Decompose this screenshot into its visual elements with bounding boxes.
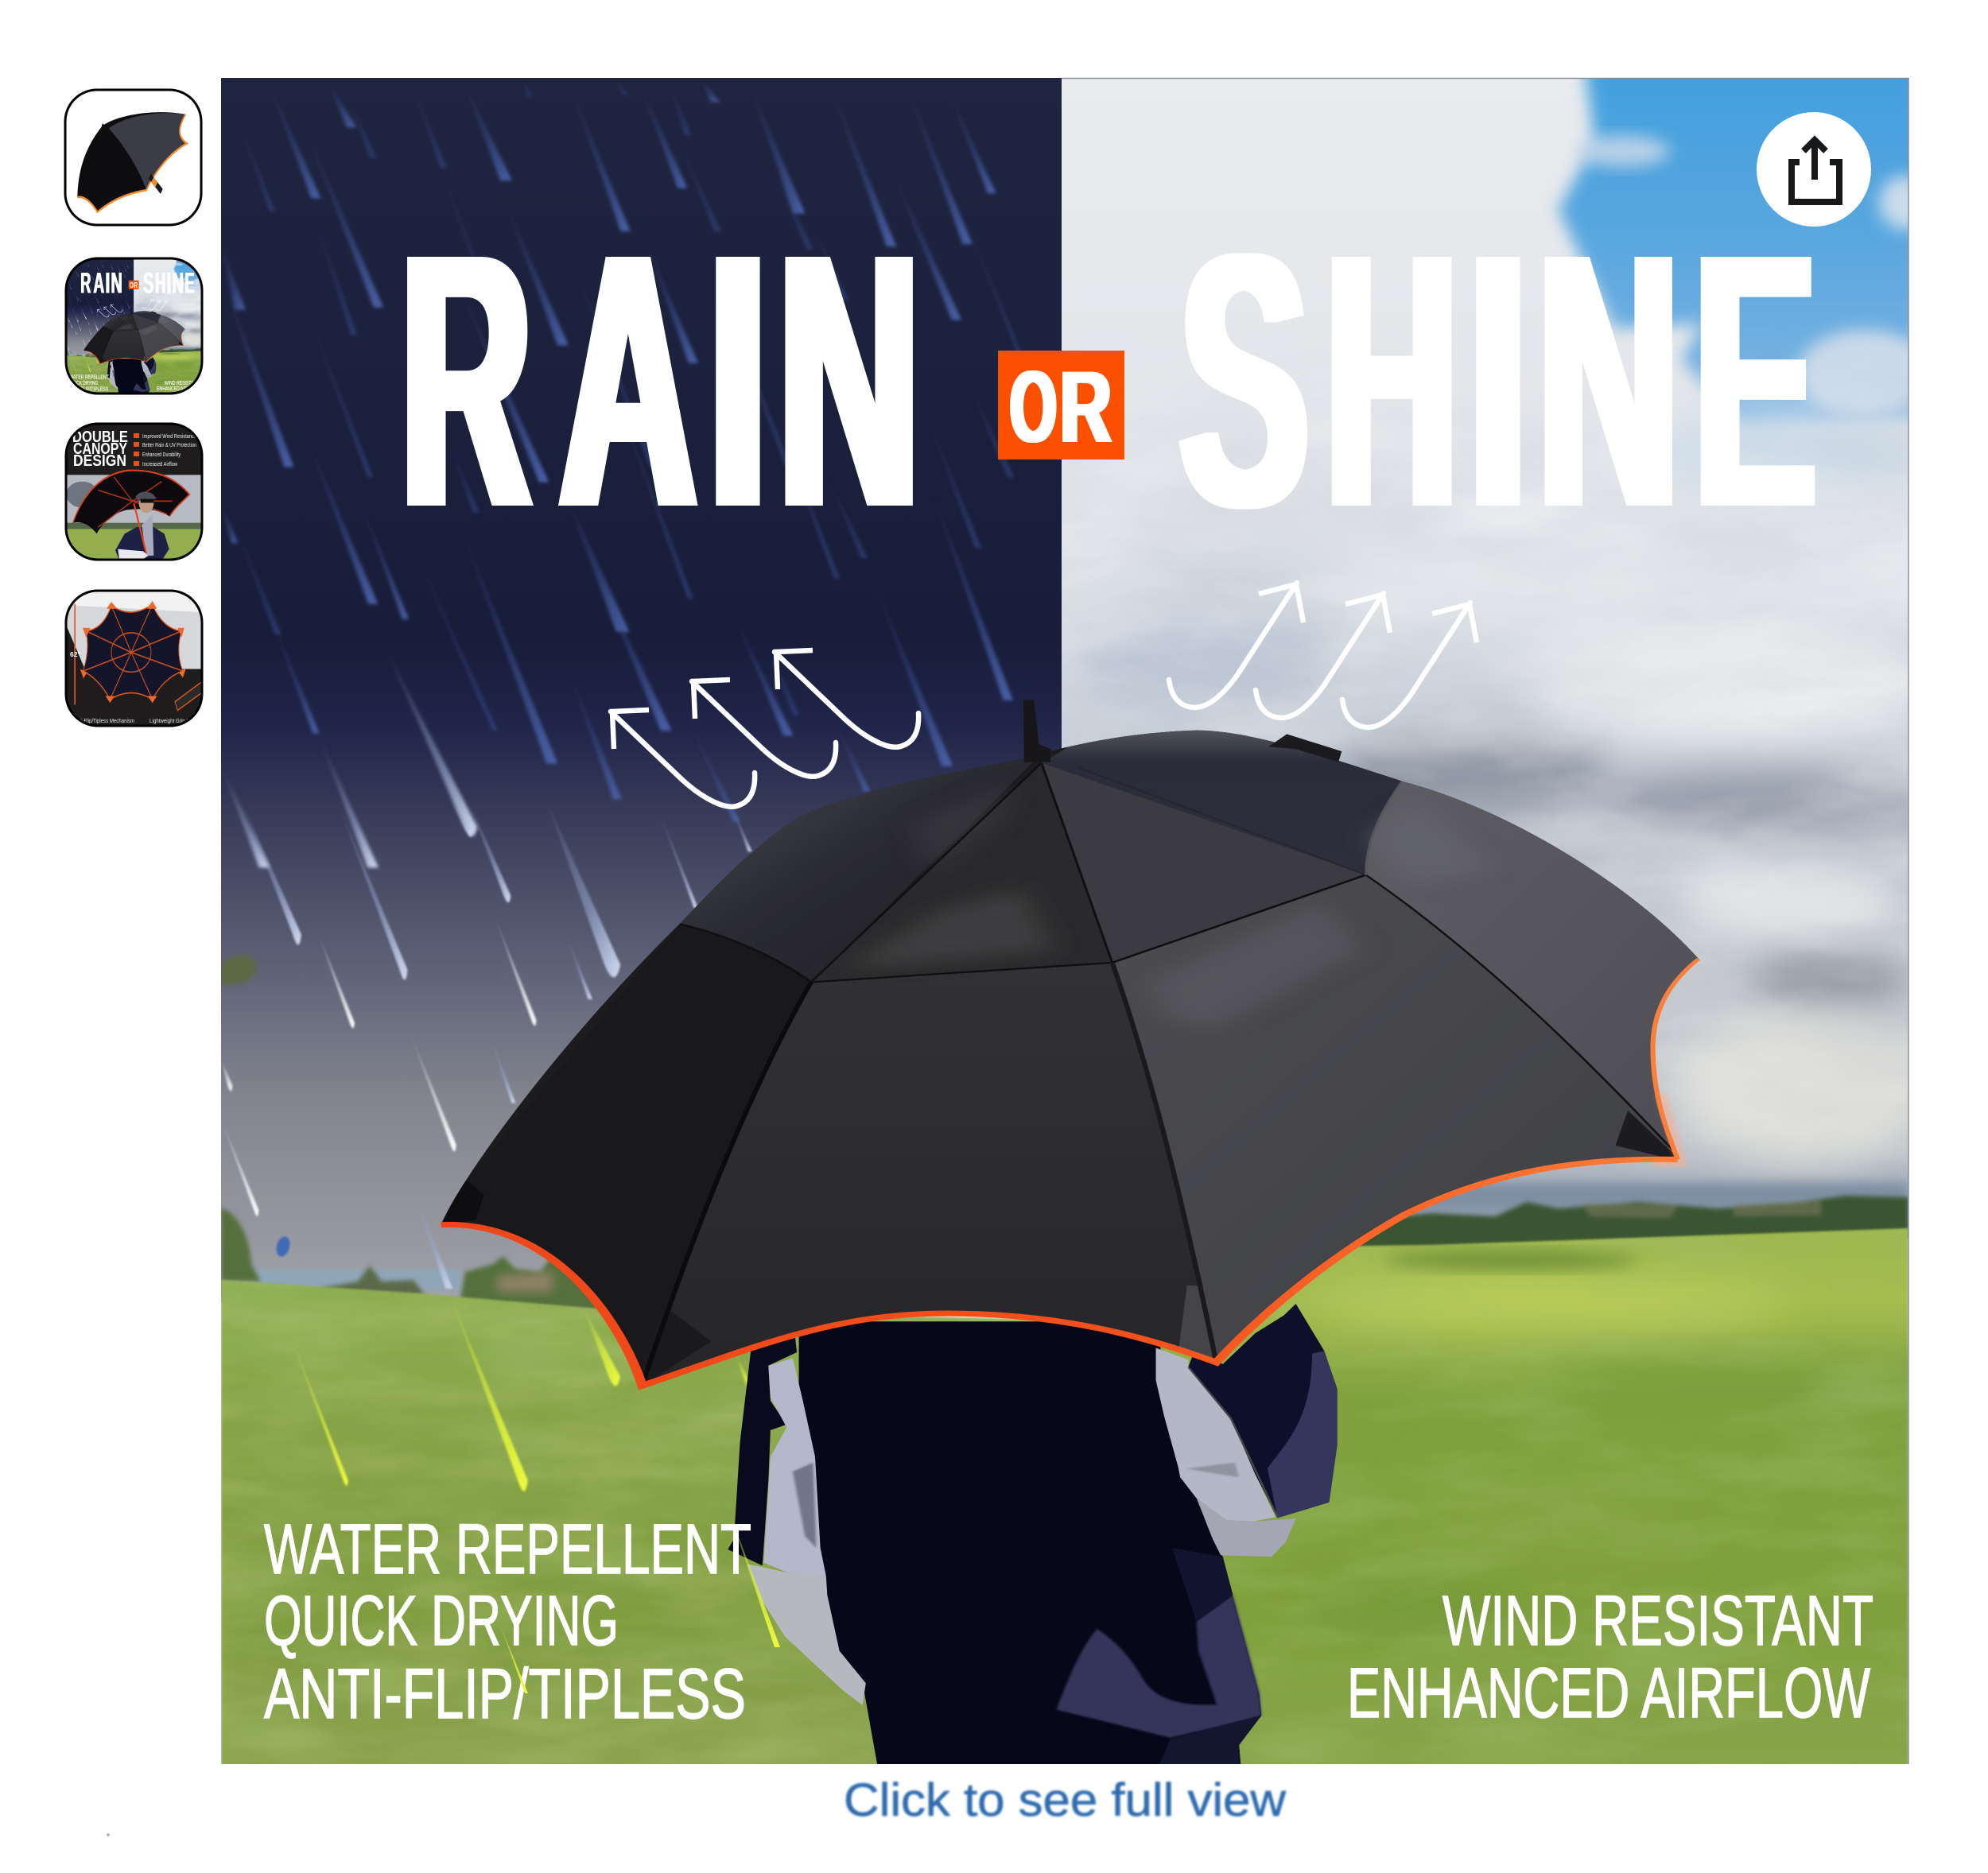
panel upper left: [680, 754, 1042, 982]
right sleeve lit panel: [1268, 1351, 1338, 1518]
feature bullets: [134, 433, 139, 466]
arrow left 1: [611, 710, 755, 807]
feature list: Increased Airflow: [142, 460, 177, 467]
treeline right: [1312, 1196, 1908, 1256]
person in navy jacket: [728, 1304, 1338, 1769]
small stray dot: [107, 1833, 110, 1836]
lit lower jacket: [1057, 1595, 1261, 1738]
feature list: [142, 432, 196, 467]
finial: [1023, 700, 1050, 762]
title SHINE: E: [1695, 179, 1815, 583]
title SHINE: H: [1326, 180, 1458, 583]
click to see full view link: Click to see full view: [844, 1774, 1287, 1826]
caption left: [264, 1509, 751, 1733]
canopy panels: [414, 712, 1761, 1402]
feature list: Enhanced Durability: [142, 451, 181, 458]
title RAIN: [402, 178, 919, 584]
lower jacket shadow: [1158, 1716, 1261, 1769]
anti-flip: ANTI-FLIP/TIPLESS: [264, 1654, 746, 1733]
feature list: Improved Wind Resistance: [142, 432, 196, 440]
orange rim right edge: [1653, 959, 1699, 1159]
title RAIN: R: [402, 179, 531, 584]
panel hairline border: [1062, 78, 1908, 1764]
canopy base: [414, 712, 1745, 1402]
thin rain over caption: [498, 1619, 528, 1693]
title SHINE: S: [1180, 180, 1309, 583]
feature list: Better Rain & UV Protection: [142, 441, 196, 448]
left grey arm: [747, 1564, 866, 1705]
water repellent: WATER REPELLENT: [264, 1509, 751, 1588]
dim panel beside sleeve: [1172, 1548, 1233, 1622]
title SHINE: [1180, 178, 1815, 583]
right cuff: [1197, 1498, 1296, 1557]
share icon: [1792, 140, 1839, 202]
thumbnail 4 frame: [66, 591, 202, 726]
wind arrows right: [1169, 583, 1477, 727]
vent flap: [1268, 734, 1342, 762]
title SHINE: N: [1538, 179, 1679, 583]
jacket torso: [799, 1321, 1261, 1769]
thumbnail 2 frame: [66, 258, 202, 394]
arrow left 3: [775, 650, 918, 747]
fabric sheen: [1145, 903, 1361, 1029]
left sleeve: [728, 1333, 797, 1565]
arrow right 2: [1256, 593, 1390, 718]
left tree: [221, 1208, 261, 1282]
thumbnail 2: rain or shine: [66, 254, 207, 394]
thumbnail 1 frame: [65, 90, 201, 225]
panel lower right: [1112, 875, 1686, 1374]
OR badge: O: [1010, 351, 1057, 464]
feature captions: Anti-Flip/Tipless Mechanism: [74, 719, 134, 724]
heading double canopy: DOUBLE: [72, 429, 128, 446]
right sleeve: [1188, 1304, 1338, 1518]
trees mid: [322, 1266, 425, 1296]
title RAIN: I: [708, 178, 768, 583]
heading double canopy: DESIGN: [73, 452, 126, 470]
feature captions: [74, 719, 202, 724]
share button: [1757, 112, 1871, 227]
right grey panel: [1156, 1348, 1276, 1522]
feature captions: Lightweight Grip Handle: [149, 719, 202, 724]
OR badge: R: [1060, 351, 1112, 464]
caption right: [1347, 1580, 1873, 1732]
size label: 62": [70, 650, 81, 658]
title RAIN: N: [779, 179, 919, 583]
rain streaks upper: [221, 79, 1035, 1491]
heading double canopy: CANOPY: [73, 440, 128, 458]
soft glow right edge: [1653, 1094, 1682, 1164]
thumbnail 1: umbrella product: [65, 90, 201, 225]
thin rain over sleeve: [728, 1507, 780, 1647]
blurred horizon: [254, 1270, 461, 1289]
orange rim bottom: [441, 1159, 1678, 1386]
floating foliage: [221, 956, 256, 986]
arrow right 1: [1169, 583, 1303, 708]
title SHINE: I: [1468, 178, 1528, 583]
left sleeve grey panel: [763, 1358, 826, 1576]
panel lower centre: [643, 963, 1225, 1393]
heading double canopy: [72, 429, 128, 470]
thumbnail 4: canopy underside: [66, 591, 202, 726]
thumbnail 3: double canopy design: [66, 424, 202, 562]
rain streaks lower: [221, 795, 752, 1491]
arrow left 2: [692, 680, 836, 777]
arrow right 3: [1342, 603, 1477, 727]
right half: bright cloudy sky: [1062, 16, 1972, 1769]
panel lower left: [414, 924, 811, 1393]
grass field left: [221, 1280, 1062, 1769]
left distant trees and grass: [221, 956, 1062, 1769]
umbrella: [414, 700, 1761, 1402]
panel upper right: [1042, 763, 1366, 963]
blue kite speck: [274, 1235, 292, 1258]
umbrella tip patches: [643, 1311, 711, 1386]
thumbnail 3 frame: [66, 424, 202, 560]
panel upper back: [1042, 723, 1404, 875]
panel upper centre: [811, 763, 1112, 982]
title RAIN: A: [560, 178, 697, 582]
quick drying: QUICK DRYING: [264, 1580, 619, 1660]
left half: stormy rain sky: [221, 78, 1062, 1302]
wind arrows left: [611, 650, 918, 807]
grass field right: [1062, 1228, 1908, 1769]
OR badge: [998, 351, 1124, 464]
seams: [643, 763, 1686, 1386]
panel far right: [1366, 768, 1761, 1164]
